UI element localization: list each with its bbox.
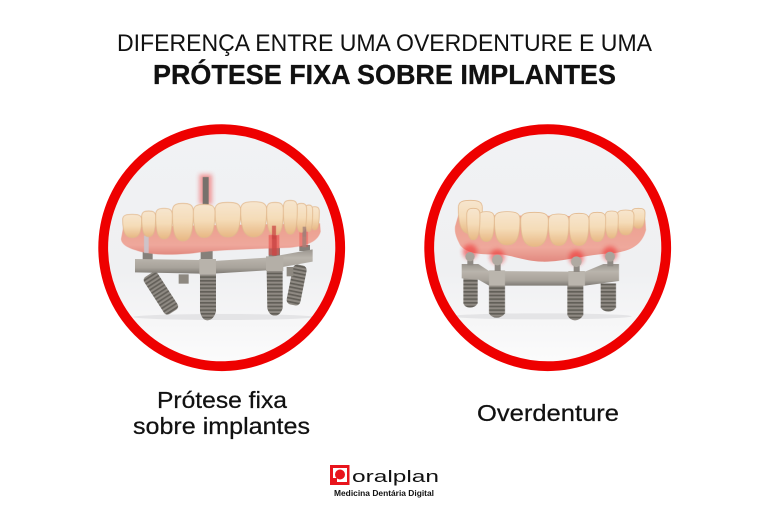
- shadow on the ground: [133, 314, 313, 320]
- icon: logo mark: [330, 465, 350, 485]
- label: prótese fixa sobre implantes: Prótese fixa: [157, 387, 287, 413]
- title: PRÓTESE FIXA SOBRE IMPLANTES: [153, 59, 616, 90]
- gum: [121, 223, 321, 255]
- panel: prótese fixa photo: [103, 129, 341, 367]
- metal bar: [135, 249, 313, 274]
- posts between gum and bar: [143, 245, 310, 260]
- title: [117, 30, 652, 90]
- logo: oralplan: [330, 465, 439, 498]
- label: prótese fixa sobre implantes: [133, 387, 310, 439]
- teeth: [458, 200, 645, 247]
- shadow on the ground: [452, 313, 632, 319]
- tagline: Medicina Dentária Digital: [334, 489, 434, 498]
- pins over teeth: [272, 226, 306, 236]
- label: prótese fixa sobre implantes: sobre implantes: [133, 413, 310, 439]
- teeth: [123, 200, 319, 241]
- implants: [142, 264, 307, 320]
- metal bar: [462, 264, 619, 286]
- panel: overdenture photo: [429, 129, 667, 367]
- wordmark: oralplan: [352, 467, 439, 486]
- implants: [463, 278, 616, 320]
- ball attachments with red glow: [463, 244, 617, 272]
- top pin with red glow: [199, 174, 212, 204]
- title: DIFERENÇA ENTRE UMA OVERDENTURE E UMA: [117, 30, 652, 57]
- gum: [455, 215, 646, 262]
- label: overdenture: Overdenture: [477, 400, 619, 426]
